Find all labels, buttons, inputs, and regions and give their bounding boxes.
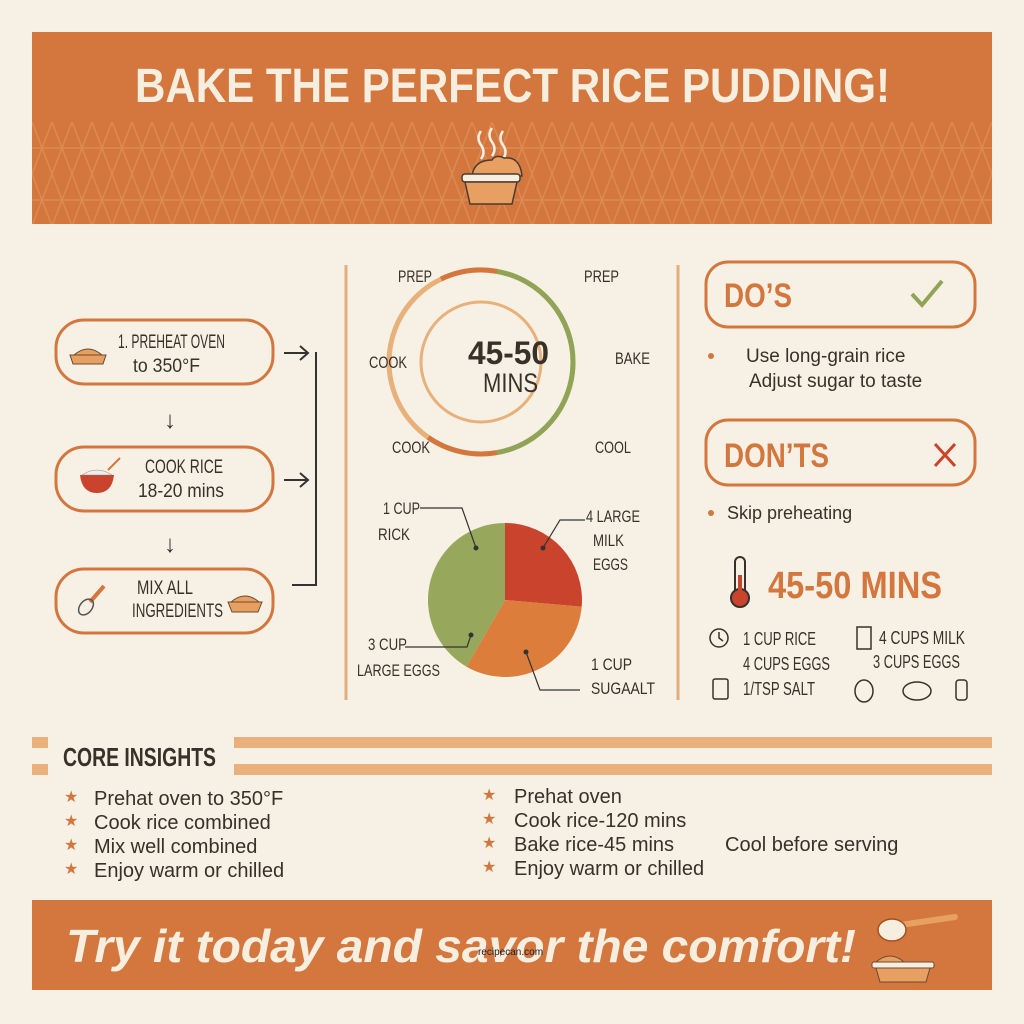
text block: insights left: Prehat oven to 350°F (94, 788, 283, 810)
panel: do's: Use long-grain rice (746, 346, 905, 367)
chart: ingredient pie: RICK (378, 525, 411, 544)
heading: core insights: CORE INSIGHTS (63, 742, 216, 772)
text block: insights right: Enjoy warm or chilled (514, 858, 704, 880)
text block: insights right: Cool before serving (725, 834, 898, 856)
step 3: MIX ALL (137, 578, 193, 599)
title: BAKE THE PERFECT RICE PUDDING! (135, 60, 890, 113)
text block: insights left: ★ (64, 789, 78, 806)
panel: time and quantities: 4 CUPS MILK (879, 628, 965, 648)
text block: insights left: Enjoy warm or chilled (94, 860, 284, 882)
step 1: 1. PREHEAT OVEN (118, 332, 225, 353)
panel: steps (56, 320, 316, 633)
chart: timing ring: COOK (369, 353, 408, 372)
panel: time and quantities: 1/TSP SALT (743, 679, 815, 699)
header banner (32, 32, 992, 224)
panel: do's: DO’S (724, 277, 792, 315)
arrow down 2: ↓ (164, 531, 176, 558)
chart: ingredient pie: EGGS (593, 555, 628, 574)
panel: time and quantities: 45-50 MINS (768, 565, 942, 607)
step 2: 18-20 mins (138, 481, 224, 502)
chart: ingredient pie: MILK (593, 531, 625, 550)
panel: do's: Adjust sugar to taste (749, 371, 922, 392)
chart: ingredient pie: 3 CUP (368, 635, 407, 654)
footer banner (32, 900, 992, 990)
footer banner: Try it today and savor the comfort! (66, 920, 856, 972)
panel: time and quantities: 3 CUPS EGGS (873, 652, 960, 672)
chart: timing ring: PREP (584, 267, 619, 286)
chart: ingredient pie: 1 CUP (383, 499, 420, 518)
text block: insights right: Bake rice-45 mins (514, 834, 674, 856)
icon: thermometer (731, 557, 749, 607)
arrows right + bracket (284, 346, 316, 585)
chart: ingredient pie: 4 LARGE (586, 507, 640, 526)
footer banner: recipecan.com (478, 947, 543, 958)
panel: don'ts (706, 420, 975, 523)
step 3 (56, 569, 273, 633)
panel: do's (706, 262, 975, 392)
panel: don'ts: DON’TS (724, 437, 829, 475)
step 2 (56, 447, 273, 511)
text block: insights left: Mix well combined (94, 836, 257, 858)
text block: insights left: Cook rice combined (94, 812, 271, 834)
icon: pudding dish (462, 128, 522, 204)
text block: insights left: ★ (64, 861, 78, 878)
step 1 (56, 320, 273, 384)
chart: ingredient pie (357, 499, 655, 698)
step 1: to 350°F (133, 356, 200, 377)
panel: time and quantities (710, 557, 967, 702)
chart: ingredient pie: SUGAALT (591, 679, 655, 698)
dividers (344, 265, 348, 700)
arrow down 1: ↓ (164, 407, 176, 434)
panel: time and quantities: 4 CUPS EGGS (743, 654, 830, 674)
chart: timing ring: COOL (595, 438, 631, 457)
panel: don'ts: Skip preheating (727, 503, 852, 523)
chart: timing ring (369, 267, 650, 457)
text block: insights left (64, 788, 284, 882)
text block: insights right: ★ (482, 787, 496, 804)
chart: timing ring: COOK (392, 438, 431, 457)
text block: insights left: ★ (64, 837, 78, 854)
text block: insights right (482, 786, 898, 880)
text block: insights right: ★ (482, 859, 496, 876)
text block: insights right: Cook rice-120 mins (514, 810, 686, 832)
panel: time and quantities: 1 CUP RICE (743, 629, 816, 649)
text block: insights right: ★ (482, 811, 496, 828)
icon: spoon and dish (872, 917, 955, 982)
text block: insights right: Prehat oven (514, 786, 622, 808)
chart: ingredient pie: LARGE EGGS (357, 661, 440, 680)
chart: timing ring: BAKE (615, 349, 650, 368)
step 2: COOK RICE (145, 457, 223, 478)
step 3: INGREDIENTS (132, 601, 223, 622)
chart: ingredient pie: 1 CUP (591, 655, 632, 674)
text block: insights right: ★ (482, 835, 496, 852)
heading: core insights (32, 737, 992, 775)
text block: insights left: ★ (64, 813, 78, 830)
chart: timing ring: 45-50 (468, 335, 549, 371)
chart: timing ring: MINS (483, 368, 538, 398)
chart: timing ring: PREP (398, 267, 432, 286)
